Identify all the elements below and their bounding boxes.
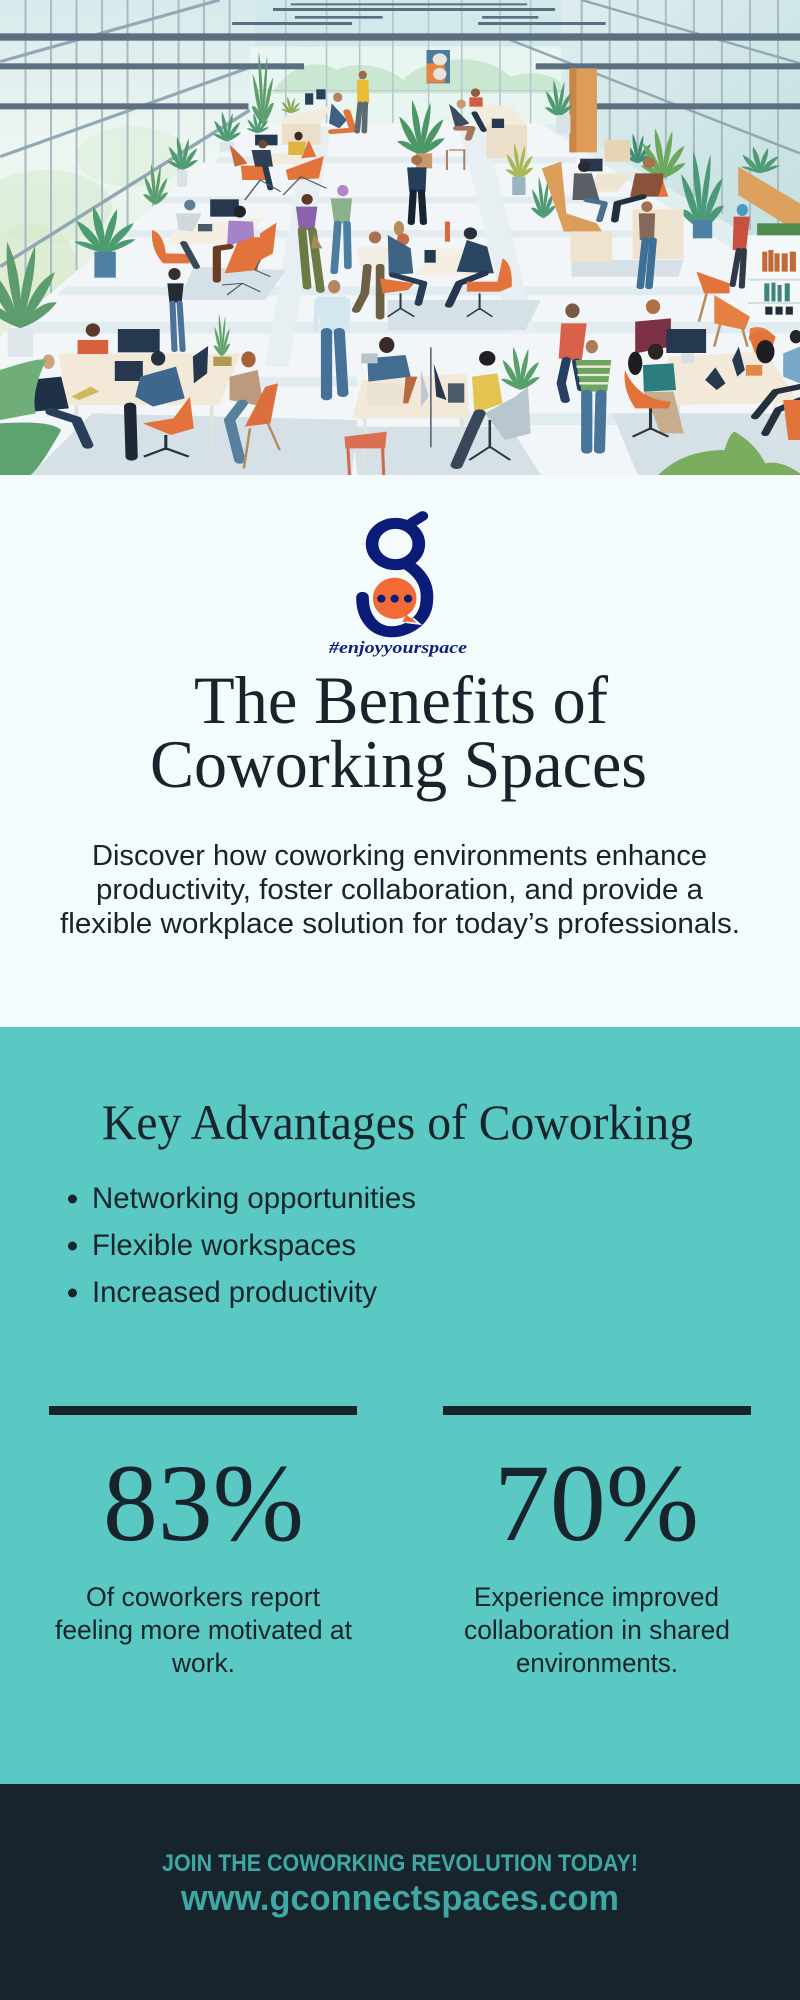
- bullet list: Flexible workspaces: [92, 1229, 356, 1262]
- hero illustration: coworking office: [0, 0, 800, 475]
- bottom center desk group: [344, 337, 531, 475]
- orange stools right: [696, 272, 776, 347]
- mid left desk group: [152, 199, 277, 295]
- standing pair right: [559, 303, 611, 450]
- logo mark: orange speech bubble: [373, 578, 420, 624]
- call to action: JOIN THE COWORKING REVOLUTION TODAY!: [162, 1850, 638, 1877]
- page background: [0, 0, 800, 1027]
- website url: www.gconnectspaces.com: [180, 1877, 619, 1918]
- stat: 83 percent: feeling more motivated at: [55, 1615, 353, 1645]
- center desk group: [356, 221, 512, 317]
- title: The Benefits of: [194, 662, 608, 738]
- floor: [0, 123, 800, 475]
- right lounge seating group: [542, 140, 750, 287]
- stat: 70 percent: environments.: [516, 1648, 678, 1678]
- bottom right desk group: [625, 299, 800, 443]
- stat: 83 percent: [49, 1406, 357, 1678]
- intro paragraph: flexible workplace solution for today’s professionals.: [60, 908, 740, 940]
- intro paragraph: productivity, foster collaboration, and provide a: [96, 874, 704, 906]
- plants along back and walls: [143, 52, 724, 238]
- title: Coworking Spaces: [150, 726, 647, 802]
- bullet list: Networking opportunities: [92, 1182, 416, 1215]
- right glass wall: [510, 0, 800, 236]
- logo: [363, 516, 427, 632]
- title: [150, 662, 647, 802]
- stat: 70 percent: 70%: [494, 1442, 699, 1564]
- intro paragraph: [60, 840, 740, 940]
- table group upper left with orange chairs: [230, 132, 327, 200]
- stat: 83 percent: Of coworkers report: [86, 1582, 321, 1612]
- left glass wall: [0, 0, 327, 350]
- stat: 70 percent: Experience improved: [474, 1582, 719, 1612]
- bullet list: Increased productivity: [92, 1276, 377, 1309]
- panel: key advantages: [0, 1027, 800, 1784]
- bullet list: [68, 1182, 416, 1309]
- back wall with trees: [250, 0, 571, 124]
- standing man in navy: [407, 155, 427, 223]
- section heading: Key Advantages of Coworking: [102, 1094, 693, 1150]
- logo mark: letter g: [363, 516, 427, 632]
- man in blue shirt standing: [315, 280, 348, 397]
- back right desk and group: [449, 88, 527, 158]
- stat: 70 percent: [443, 1406, 751, 1678]
- phone caller and potted plant left: [74, 207, 184, 350]
- stat: 83 percent: work.: [171, 1648, 235, 1678]
- ceiling beams: [0, 3, 800, 109]
- stat: 70 percent: collaboration in shared: [464, 1615, 730, 1645]
- logo tagline: #enjoyyourspace: [328, 638, 468, 657]
- footer panel: [0, 1784, 800, 2000]
- corner plants: [0, 242, 800, 475]
- orange column and wall planter: [569, 68, 800, 233]
- stat: 83 percent: 83%: [103, 1442, 304, 1564]
- bottom left desk group: [28, 313, 280, 468]
- back left desk and worker: [282, 71, 369, 145]
- intro paragraph: Discover how coworking environments enhance: [92, 840, 707, 872]
- bookshelf with books: [748, 223, 800, 322]
- standing colleagues center: [296, 185, 352, 290]
